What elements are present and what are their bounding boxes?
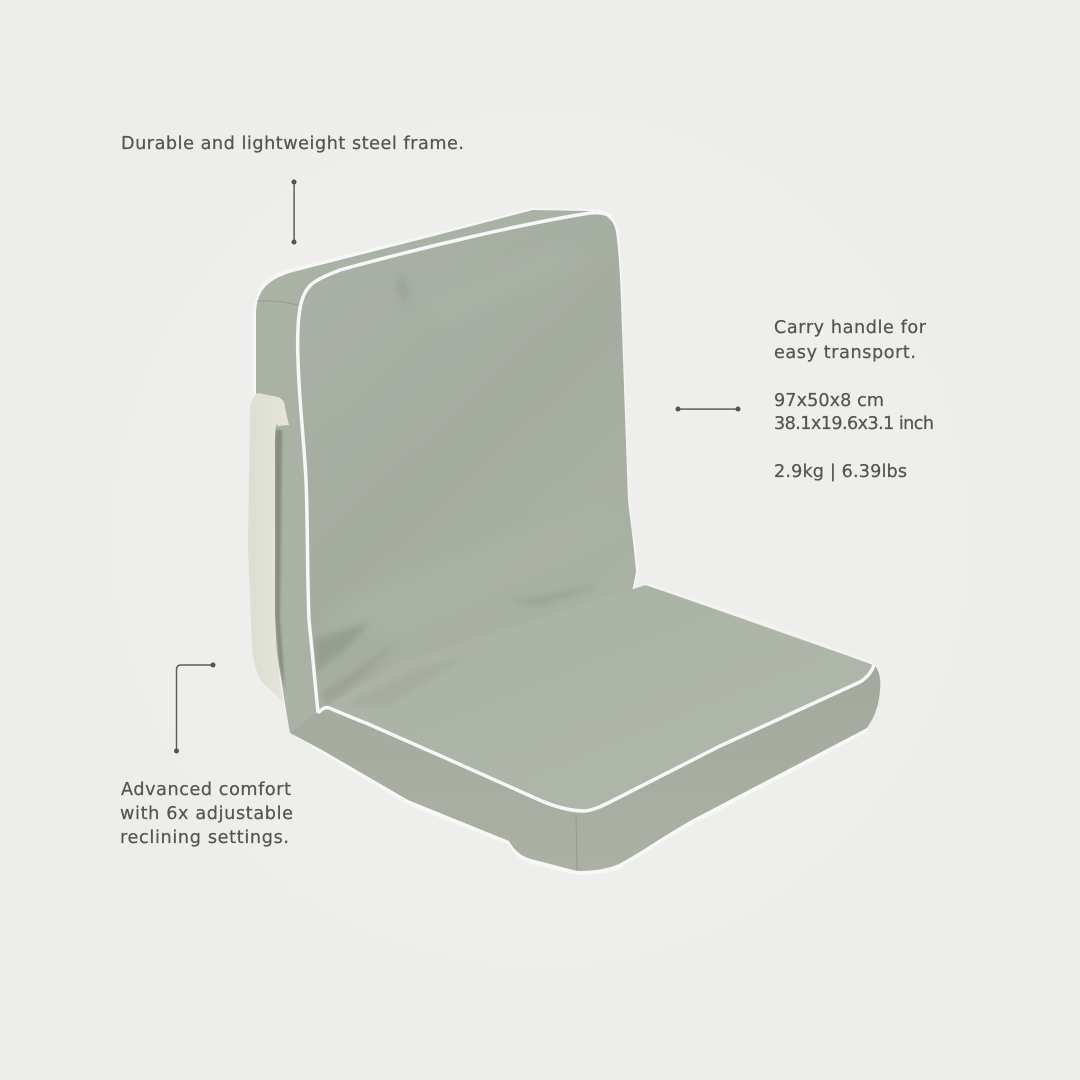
back cushion side panel	[256, 210, 612, 733]
strap body	[248, 393, 289, 703]
label: reclining comfort: Advanced comfort	[121, 780, 291, 800]
label: steel frame: Durable and lightweight steel frame.	[121, 134, 464, 154]
connector: steel frame	[292, 180, 296, 244]
label: carry handle and specifications: 2.9kg | 6.39lbs	[774, 462, 907, 482]
back cushion	[253, 208, 638, 760]
label: carry handle and specifications: easy transport.	[774, 343, 916, 363]
connector: carry handle	[676, 406, 740, 412]
label: carry handle and specifications: 97x50x8 cm	[774, 391, 884, 411]
label: reclining comfort: with 6x adjustable	[120, 804, 293, 824]
seat underside piping	[290, 667, 881, 875]
label: carry handle and specifications: Carry handle for	[774, 318, 927, 338]
seat rear edge piping	[646, 584, 874, 664]
back cushion white piping	[298, 213, 610, 713]
seat top surface	[319, 585, 874, 811]
side panel seam	[257, 301, 298, 305]
back cushion outer edge piping	[253, 208, 638, 760]
seat folds	[345, 655, 470, 708]
connector: reclining settings	[174, 662, 216, 754]
label: reclining comfort	[120, 780, 293, 848]
label: carry handle and specifications: 38.1x19.6x3.1 inch	[774, 414, 934, 434]
back cushion front face	[299, 214, 636, 740]
carry handle strap	[248, 393, 289, 703]
seat white piping	[319, 665, 874, 811]
label: reclining comfort: reclining settings.	[120, 828, 289, 848]
seat side panel	[290, 664, 880, 871]
seat corner seam	[576, 815, 577, 870]
seat cushion	[290, 584, 881, 875]
product: reclining seat cushion	[248, 208, 881, 875]
strap shadow	[275, 430, 285, 690]
label: carry handle and specifications	[774, 318, 934, 482]
fabric folds on back cushion	[314, 240, 630, 704]
